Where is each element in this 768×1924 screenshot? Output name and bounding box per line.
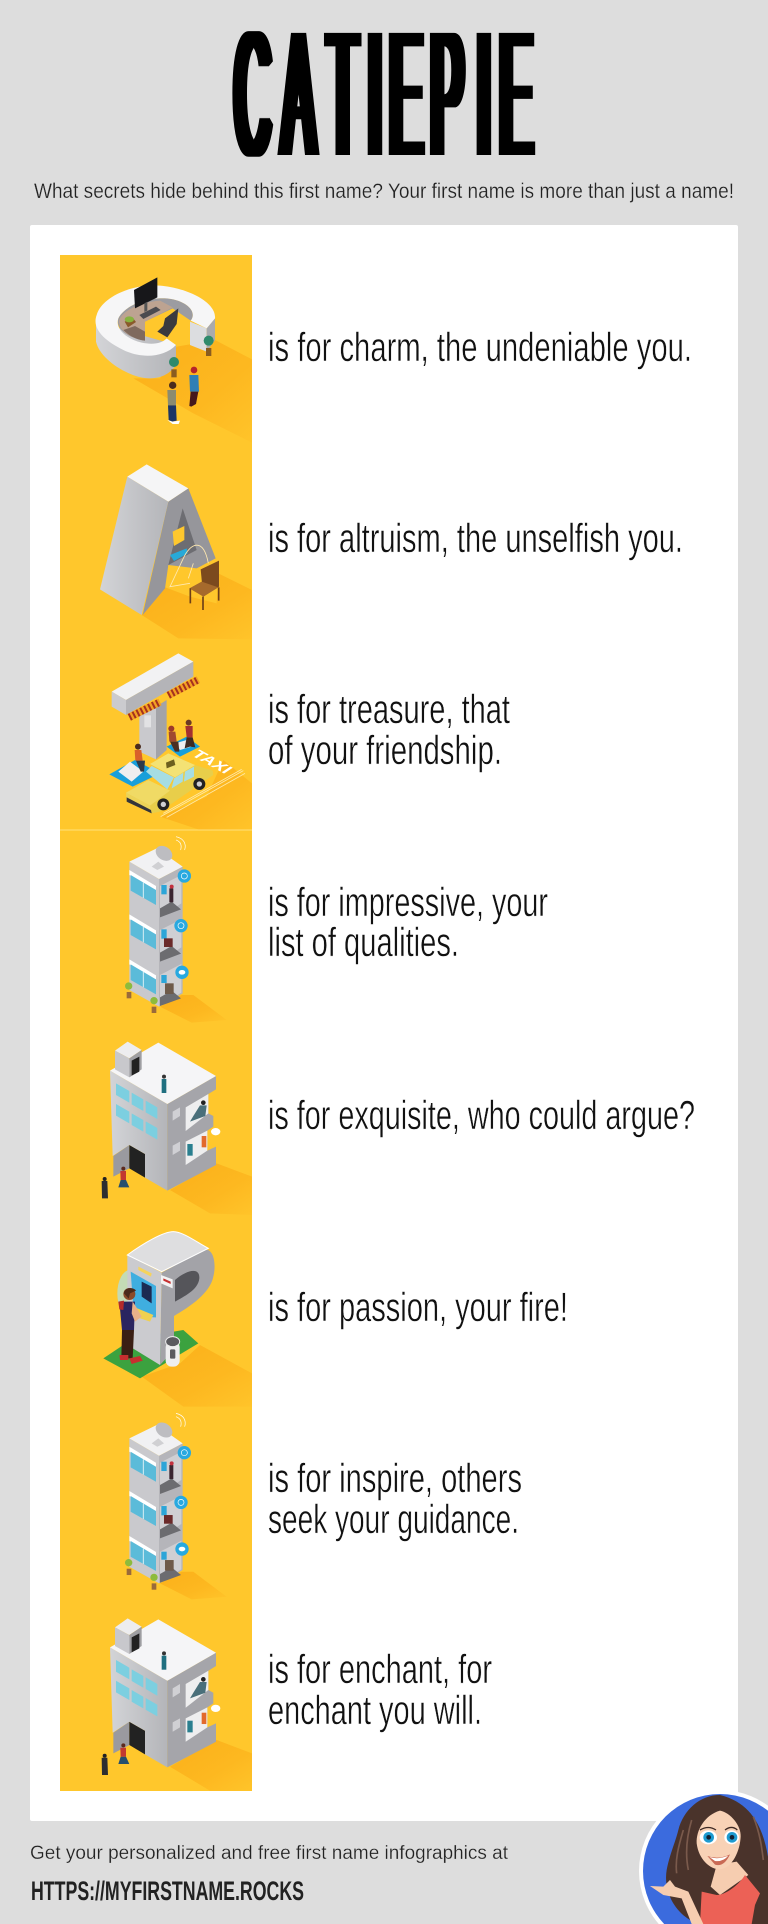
text: T row [268, 686, 510, 773]
text: I row: is for impressive, your [268, 879, 548, 925]
icon: letter C reception desk [96, 277, 252, 443]
text: second I row [268, 1455, 522, 1542]
text: second I row: is for inspire, others [268, 1455, 522, 1501]
panel: yellow illustration column [60, 255, 252, 1791]
icon: letter I office tower [125, 837, 227, 1023]
text: second E row: is for enchant, for [268, 1646, 492, 1692]
icon: letter I office tower repeat [125, 1413, 227, 1599]
text: I row [268, 879, 548, 965]
icon: letter E office building repeat [102, 1618, 252, 1791]
text: second E row [268, 1646, 492, 1733]
title: CATIEPIE [235, 0, 532, 193]
icon: avatar badge [639, 1790, 768, 1924]
TAXI road text: TAXI [187, 748, 236, 776]
icon: letter T taxi stand [109, 653, 252, 830]
icon: letter A with desk and chair [100, 464, 252, 639]
text: T row: of your friendship. [268, 727, 502, 773]
text: second I row: seek your guidance. [268, 1496, 519, 1542]
text: I row: list of qualities. [268, 919, 459, 965]
footer call to action: Get your personalized and free first name infographics at [30, 1843, 509, 1864]
panel: white card [30, 225, 738, 1821]
icon: letter P cash machine [103, 1232, 252, 1407]
text: second E row: enchant you will. [268, 1687, 482, 1733]
divider line between rows [60, 830, 252, 831]
icon: letter E office building [102, 1042, 252, 1215]
footer url: HTTPS://MYFIRSTNAME.ROCKS [31, 1876, 304, 1906]
text: T row: is for treasure, that [268, 686, 510, 732]
text: P row: is for passion, your fire! [268, 1284, 568, 1330]
